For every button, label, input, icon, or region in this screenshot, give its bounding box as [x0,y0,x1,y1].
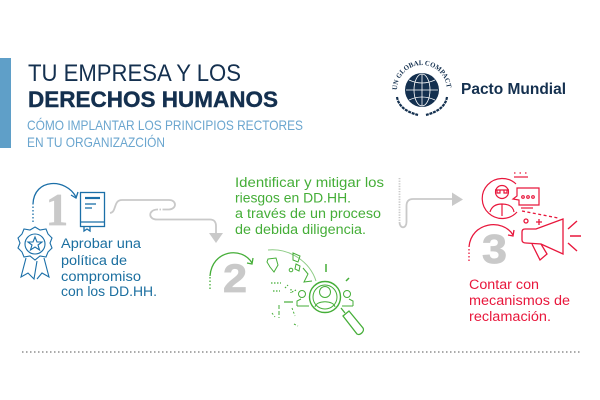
icon: person with speech bubble [482,173,539,219]
step 1 text: política de [61,253,127,268]
arc arrow 1 [33,184,78,222]
step 3 text: reclamación. [469,309,551,324]
icon: rosette [18,227,52,279]
connector 1 to 2 [110,200,223,243]
subtitle: CÓMO IMPLANTAR LOS PRINCIPIOS RECTORES [27,117,303,133]
logo: UN Global Compact: UN GLOBAL COMPACT [392,60,452,90]
title block: TU EMPRESA Y LOS [28,60,241,87]
icon: globe and magnifier [267,250,363,334]
number 1: 1 [46,184,68,235]
step 1 text: Aprobar una [61,236,142,251]
step 3 text: Contar con [469,277,539,292]
number 3: 3 [482,226,507,272]
step 3 text: mecanismos de [469,293,570,308]
icon: megaphone [522,211,581,260]
brand name: Pacto Mundial [461,81,566,98]
step 3 text [469,277,570,324]
step 1 [18,184,157,299]
step 2 text: a través de un proceso [235,206,381,221]
step 2 text: riesgos en DD.HH. [235,190,351,206]
arc arrow 3 [469,225,514,261]
arc arrow 2 [210,253,253,289]
step 2 text: de debida diligencia. [235,222,366,237]
step 1 text [61,236,157,299]
number 2: 2 [223,257,247,301]
title block [28,60,278,112]
step 1 text: con los DD.HH. [61,284,157,299]
connector 2 to 3 [400,178,463,227]
subtitle [27,117,303,150]
step 3 graphic [469,173,581,324]
title block: DERECHOS HUMANOS [28,87,278,112]
icon: book [80,192,104,231]
step 2 graphic [210,250,363,334]
subtitle: EN TU ORGANIZAZCIÓN [27,134,165,150]
accent bar [0,58,11,148]
step 2 text [235,175,384,237]
step 1 text: compromiso [61,269,141,284]
logo: UN Global Compact [392,60,452,116]
step 2 text: Identificar y mitigar los [235,175,384,190]
